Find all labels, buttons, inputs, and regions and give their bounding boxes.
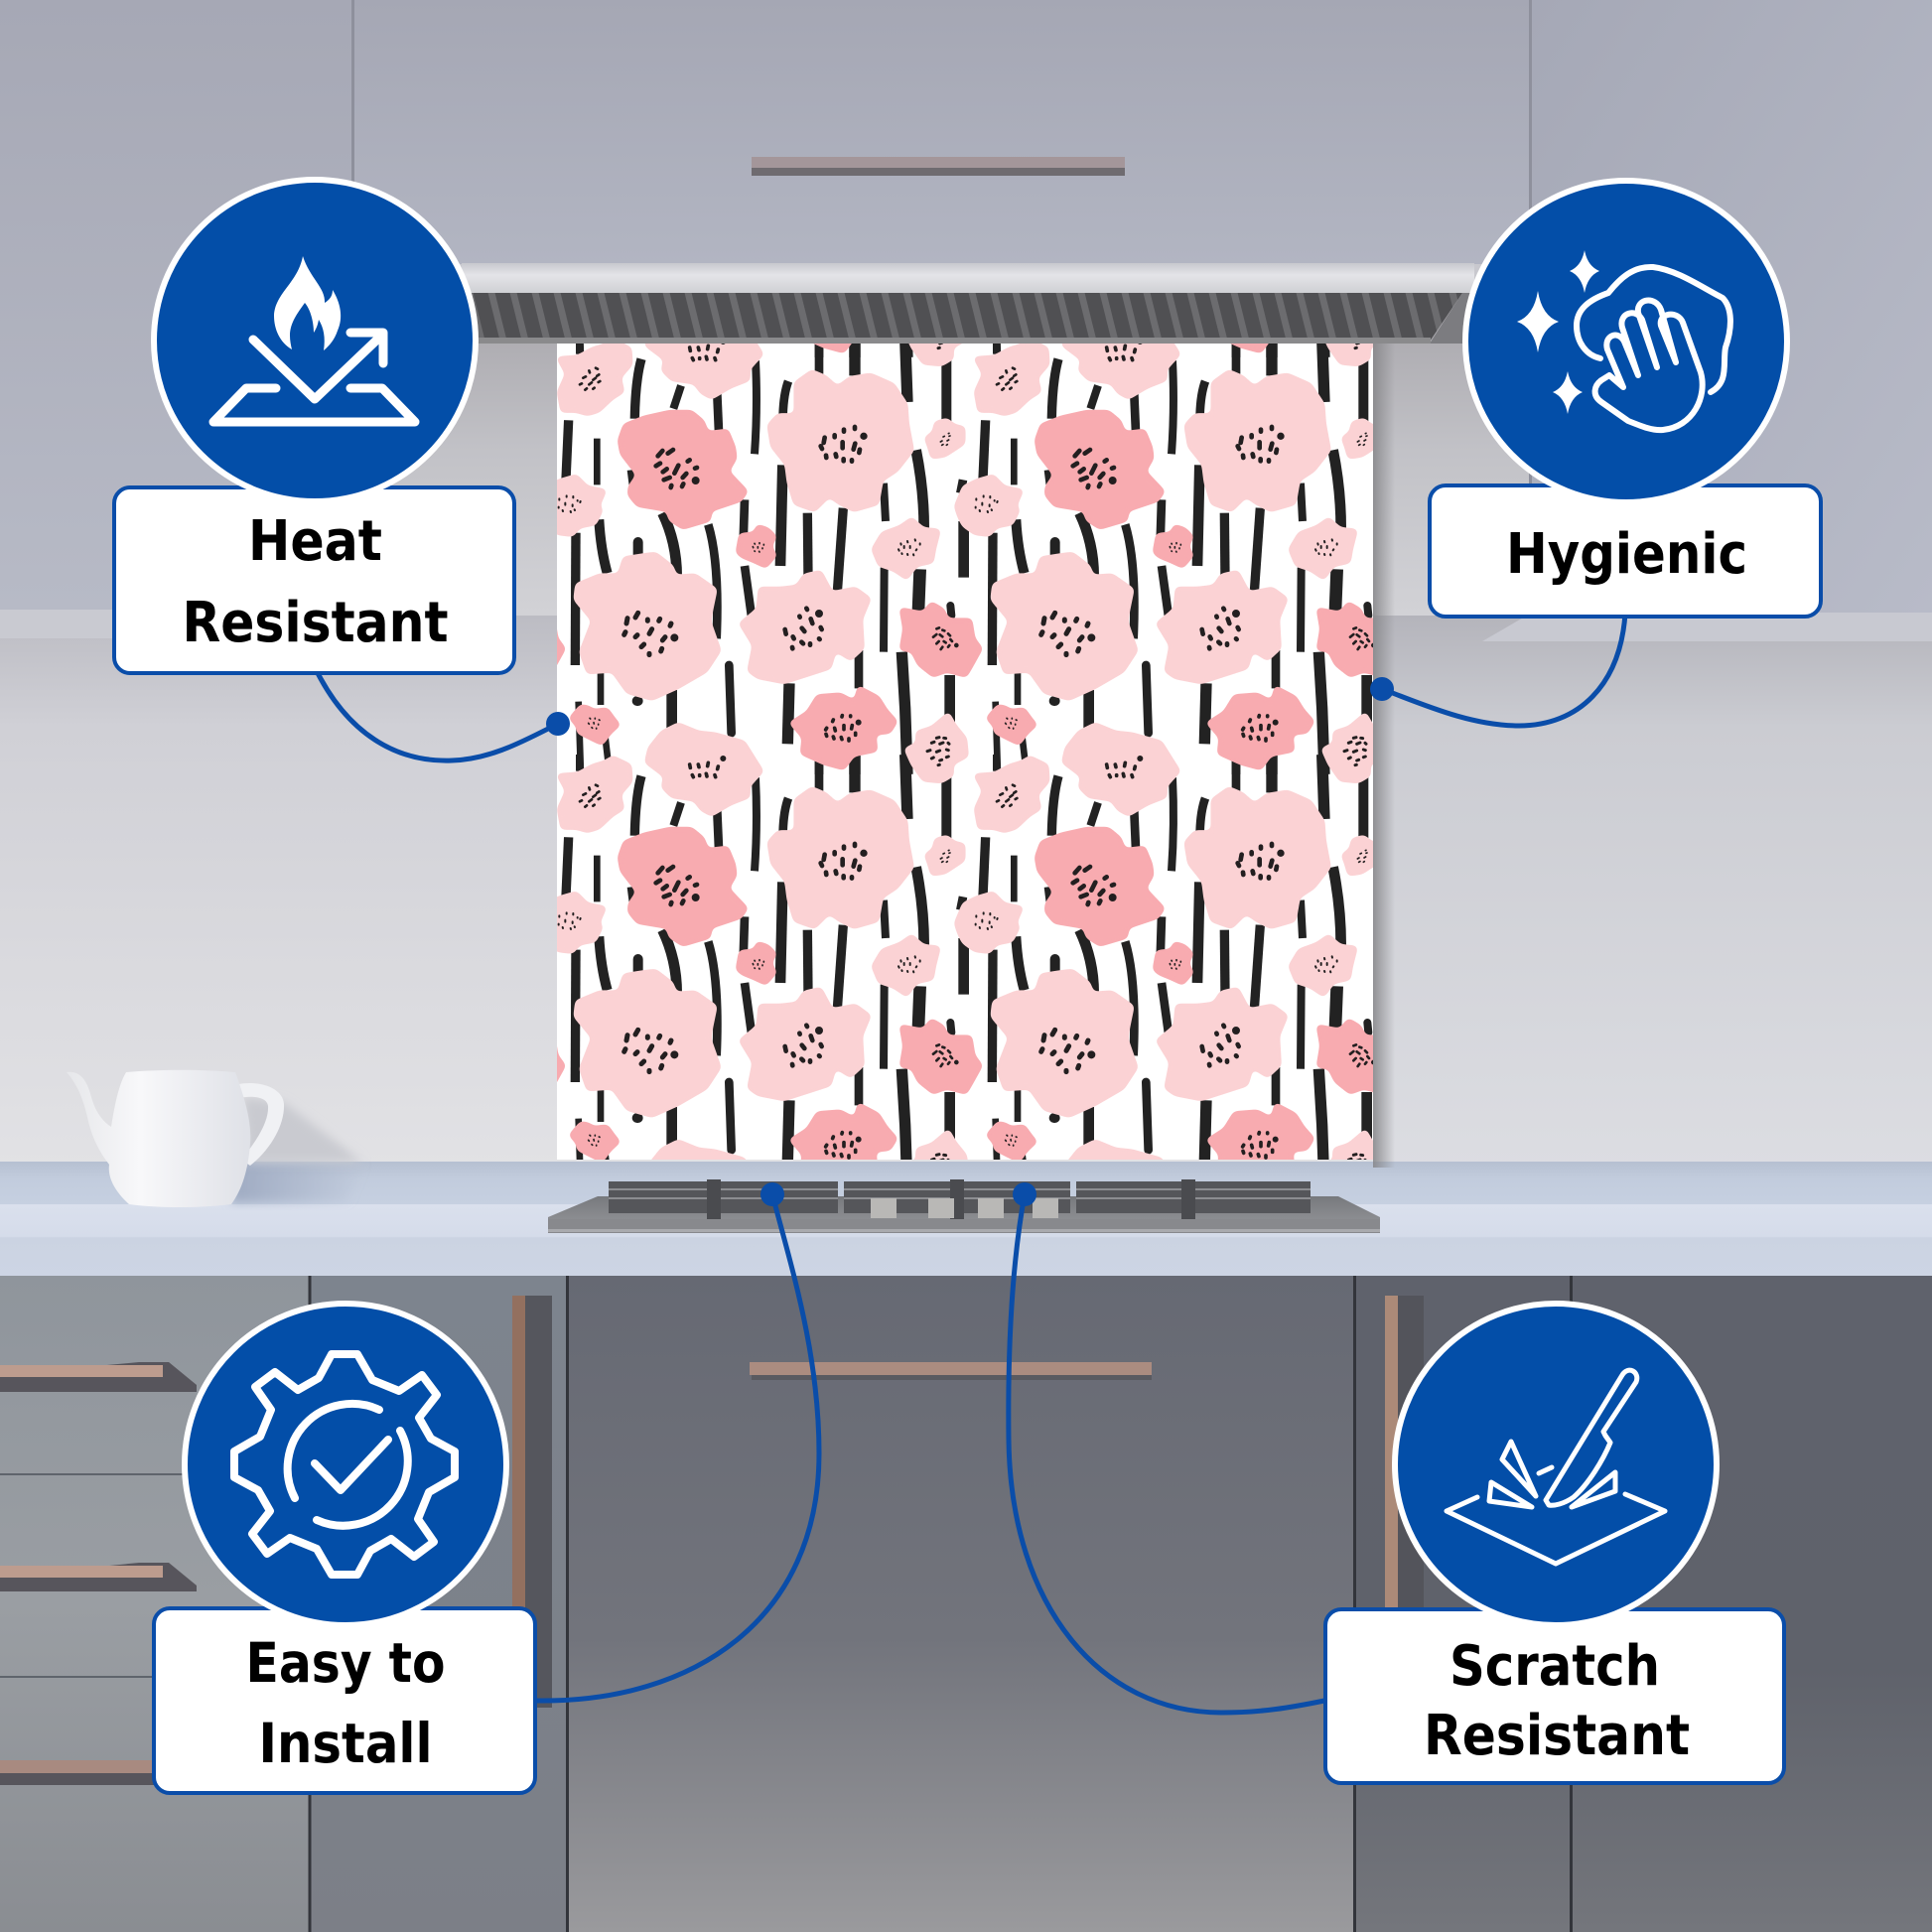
label text: Install bbox=[258, 1712, 433, 1775]
countertop front bbox=[0, 1204, 1932, 1276]
black stripes pattern bbox=[149, 0, 1381, 1191]
label text bbox=[1424, 1634, 1690, 1768]
cooker hood bbox=[462, 263, 1479, 344]
badge circle bbox=[1465, 181, 1787, 502]
upper centre cabinet bbox=[354, 0, 1529, 264]
label box bbox=[1325, 1609, 1784, 1783]
badge circle bbox=[185, 1304, 506, 1625]
lower cabinets bbox=[0, 1276, 1932, 1932]
centre door handle bbox=[750, 1362, 1152, 1380]
teapot bbox=[67, 1070, 367, 1207]
label text: Resistant bbox=[1424, 1704, 1690, 1768]
label text: Resistant bbox=[183, 591, 449, 655]
label box bbox=[154, 1608, 535, 1793]
gas hob bbox=[548, 1179, 1380, 1233]
label text: Scratch bbox=[1449, 1634, 1660, 1699]
icon: gear with check mark bbox=[234, 1354, 455, 1575]
splashback shadow bbox=[1373, 344, 1395, 1168]
pink flowers pattern bbox=[122, 0, 1397, 1231]
upper right cabinet bbox=[1532, 0, 1932, 613]
flower seed dots bbox=[142, 0, 1375, 1182]
connector: Easy to Install bbox=[537, 1182, 819, 1701]
callout: Hygienic bbox=[1430, 181, 1821, 617]
badge circle bbox=[1395, 1304, 1717, 1625]
icon: flame over surface bbox=[213, 256, 415, 422]
drawer handles bbox=[0, 1362, 197, 1785]
icon: knife scratching surface bbox=[1447, 1370, 1665, 1564]
countertop back surface bbox=[0, 1162, 1932, 1205]
callout: Heat Resistant bbox=[114, 180, 514, 673]
callout: Easy to Install bbox=[154, 1304, 535, 1793]
label text bbox=[246, 1631, 445, 1775]
cabinet undersides bbox=[0, 610, 1932, 641]
badge circle bbox=[154, 180, 476, 501]
cabinet gaps bbox=[353, 0, 1531, 613]
vertical door handles bbox=[512, 1296, 1424, 1708]
label text bbox=[183, 509, 449, 655]
upper left cabinet bbox=[0, 0, 351, 610]
panel: floral splashback bbox=[557, 344, 1373, 1160]
icon: hand wiping with sparkles bbox=[1517, 250, 1730, 430]
connector: Heat Resistant bbox=[315, 667, 570, 760]
label text: Easy to bbox=[246, 1631, 445, 1695]
label text: Hygienic bbox=[1506, 522, 1747, 587]
label box bbox=[114, 487, 514, 673]
label box bbox=[1430, 485, 1821, 617]
callout: Scratch Resistant bbox=[1325, 1304, 1784, 1783]
connector: Scratch Resistant bbox=[1009, 1182, 1324, 1713]
connector: Hygienic bbox=[1370, 614, 1625, 726]
label text: Heat bbox=[248, 509, 382, 574]
upper centre handle bbox=[752, 157, 1125, 176]
wall between cabinets bbox=[0, 288, 1932, 1172]
